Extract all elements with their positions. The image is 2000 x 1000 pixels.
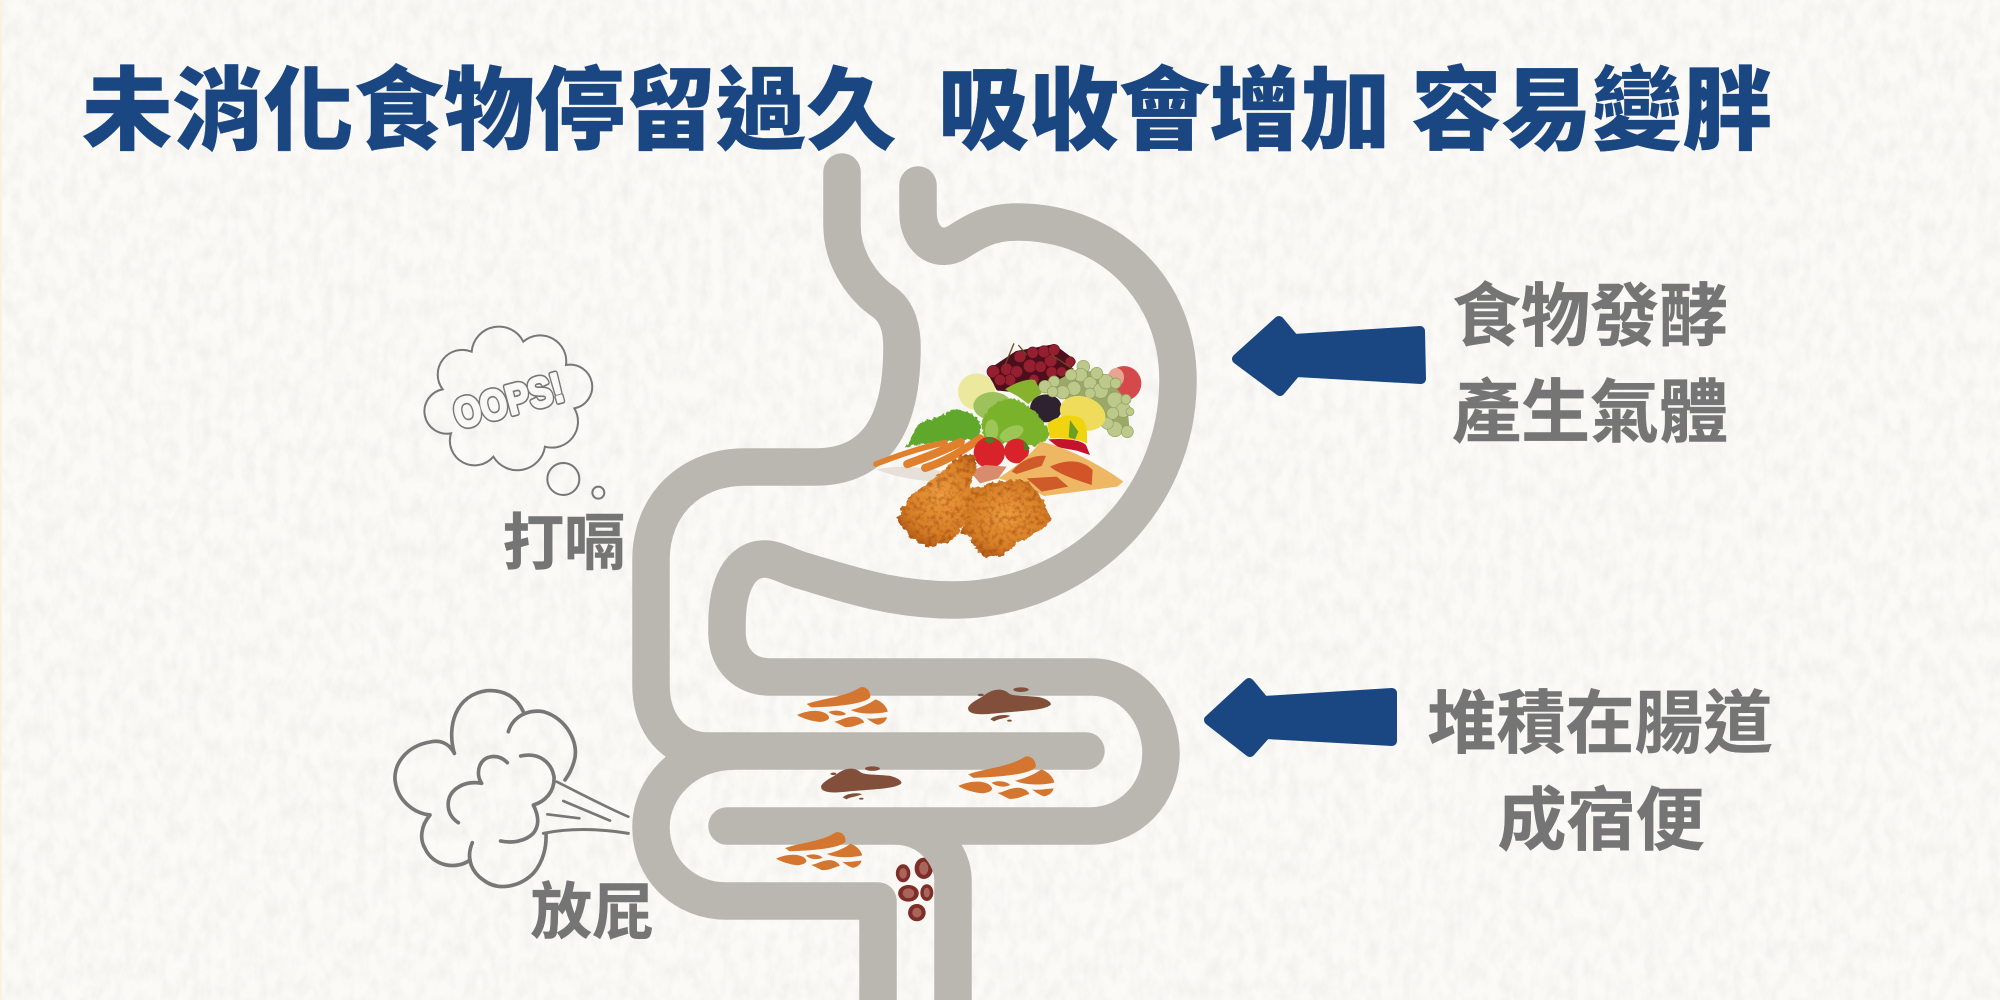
OOPS text: OOPS! [448, 363, 568, 438]
lettuce [904, 410, 982, 448]
label: food ferments, produces gas [1452, 278, 1728, 451]
label: food ferments, produces gas: 食物發酵 [1452, 278, 1728, 355]
broccoli [982, 398, 1049, 447]
title: 容易變胖 [1411, 61, 1773, 162]
red pepper [1048, 439, 1090, 455]
yellow pepper [1047, 415, 1087, 443]
stomach and intestine loop [727, 185, 1178, 826]
carrots [876, 438, 980, 468]
label: accumulates in intestines, becomes stool: 成宿便 [1498, 782, 1704, 859]
arrow: intestine [1209, 683, 1392, 752]
plum [1030, 394, 1062, 422]
digestive tract [651, 172, 1178, 1000]
orange stool 1 [797, 687, 888, 727]
rectum branch [895, 826, 953, 1000]
esophagus and small intestine upper channel [651, 172, 1086, 751]
icon: gas cloud [395, 691, 628, 887]
food illustration [876, 343, 1141, 557]
stool pellets [896, 858, 933, 921]
fried chicken [897, 454, 1052, 557]
OOPS text: OOPS! [448, 363, 568, 438]
brown stool 1 [968, 687, 1051, 722]
pizza slice [998, 442, 1123, 496]
bacon [970, 465, 1007, 483]
label: food ferments, produces gas: 產生氣體 [1452, 374, 1728, 451]
title [82, 61, 1773, 162]
label: accumulates in intestines, becomes stool: 堆積在腸道 [1428, 685, 1772, 762]
green grapes [1039, 360, 1134, 438]
thought bubble: burp [424, 327, 604, 499]
green apple [973, 392, 1012, 420]
tomatoes [974, 437, 1005, 468]
yellow apple [958, 373, 995, 410]
star fruit [1005, 380, 1042, 404]
label: accumulates in intestines, becomes stool [1428, 685, 1772, 859]
red grapes [987, 343, 1075, 390]
small bubbles [547, 463, 604, 499]
title: 未消化食物停留過久 [82, 61, 897, 162]
orange stool 2 [958, 756, 1054, 799]
label: flatulence: 放屁 [530, 878, 654, 947]
red apple [1107, 366, 1141, 401]
arrow: stomach [1237, 321, 1421, 391]
orange stool 3 [776, 832, 862, 870]
title: 吸收會增加 [938, 61, 1391, 162]
plate shadow [877, 467, 943, 482]
label: burp: 打嗝 [502, 509, 626, 578]
cloud outline [424, 327, 592, 470]
brown stool 2 [821, 766, 901, 800]
lemon [1055, 390, 1110, 436]
lower intestine bend [651, 751, 878, 1000]
